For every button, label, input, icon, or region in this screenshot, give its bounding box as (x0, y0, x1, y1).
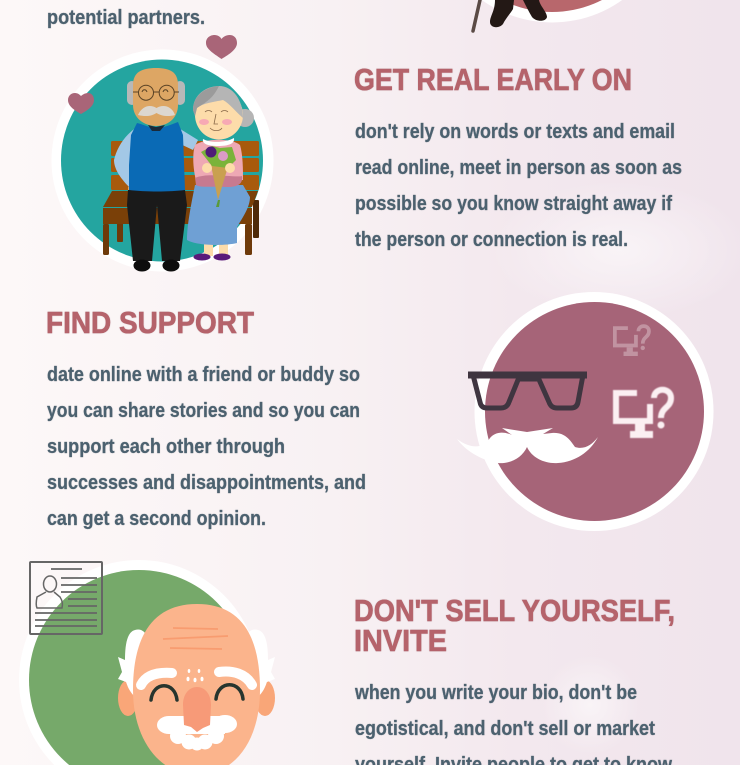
text block: get real early on: the person or connection is real. (355, 229, 628, 251)
icon: profile card (30, 562, 102, 634)
text block: get real early on: read online, meet in person as soon as (355, 157, 682, 179)
text block: find support (47, 364, 366, 530)
text block: get real early on: possible so you know straight away if (355, 193, 672, 215)
circle: teal background (52, 50, 274, 272)
heading: find support: FIND SUPPORT (46, 305, 254, 340)
heading: don't sell yourself, invite: INVITE (354, 623, 447, 658)
head (118, 604, 275, 765)
text block: don't sell yourself (354, 682, 672, 765)
illustration: elderly couple on bench (52, 35, 274, 272)
heading: don't sell yourself, invite: DON'T SELL YOURSELF, (354, 593, 675, 628)
illustration: previous tip circle with cane and feet (432, 0, 672, 31)
text block: don't sell yourself: when you write your bio, don't be (354, 682, 637, 704)
icon: glasses (468, 375, 587, 408)
text block: find support: you can share stories and so you can (47, 400, 360, 422)
circle: rose background (474, 292, 714, 531)
text block: find support: support each other through (47, 436, 285, 458)
heading: get real early on: GET REAL EARLY ON (354, 62, 632, 97)
text block: find support: successes and disappointments, and (47, 472, 366, 494)
icon: computer question (616, 390, 671, 438)
text block: don't sell yourself: egotistical, and don't sell or market (355, 718, 655, 740)
text block: get real early on: don't rely on words or texts and email (355, 121, 675, 143)
text: end of previous tip: potential partners. (47, 7, 205, 29)
illustration: disguise glasses and moustache with computer questions (457, 292, 714, 531)
man (114, 68, 198, 272)
woman (187, 86, 254, 260)
icon: white moustache (457, 428, 598, 463)
text block: get real early on (355, 121, 682, 251)
bench (103, 141, 259, 255)
heading: don't sell yourself, invite (354, 593, 675, 658)
circle: green background (19, 560, 259, 765)
illustration: smiling old man with profile card (19, 560, 275, 765)
icon: large heart (206, 35, 237, 59)
text block: find support: date online with a friend or buddy so (47, 364, 360, 386)
icon: small heart (68, 93, 94, 114)
icon: faded computer question (615, 326, 649, 356)
text block: find support: can get a second opinion. (47, 508, 266, 530)
